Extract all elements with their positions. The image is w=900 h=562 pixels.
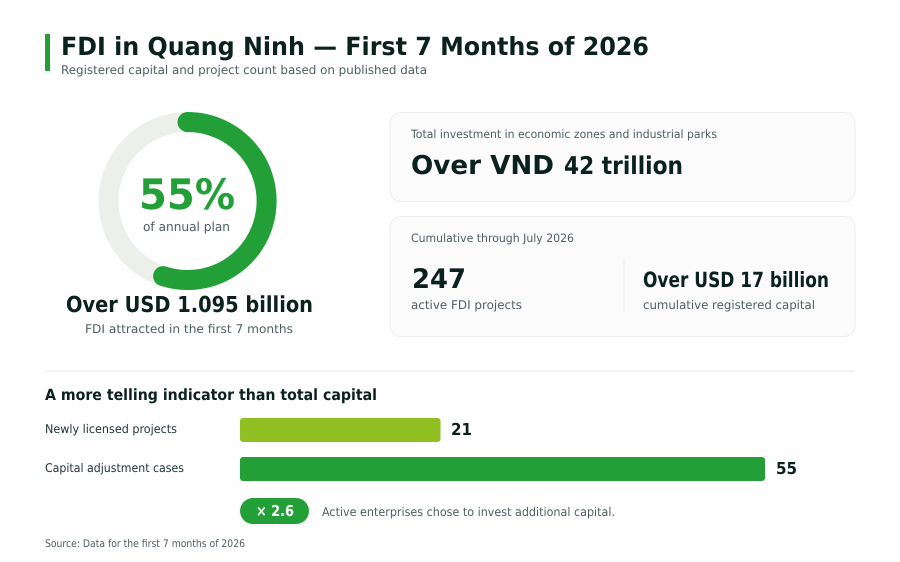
- percentage value: 55%: [139, 170, 235, 219]
- FDI caption: FDI attracted in the first 7 months: [85, 322, 293, 336]
- subtitle: Registered capital and project count based on published data: [61, 63, 427, 77]
- multiplier pill: × 2.6: [256, 502, 294, 520]
- capital value: Over USD 17 billion: [643, 268, 829, 292]
- investment value: Over VND: [411, 151, 554, 181]
- investment value: 42 trillion: [564, 151, 683, 180]
- bar row: capital adjustment cases: Capital adjustment cases: [45, 461, 184, 475]
- donut chart: [108, 122, 267, 280]
- bar row: capital adjustment cases: [45, 457, 797, 481]
- multiplier pill: [240, 498, 309, 524]
- panel: donut progress: [66, 122, 313, 336]
- section heading: A more telling indicator than total capital: [45, 386, 377, 404]
- header: [45, 32, 649, 77]
- bar row: newly licensed projects: [45, 418, 472, 442]
- projects caption: active FDI projects: [411, 298, 522, 312]
- percentage caption: of annual plan: [143, 219, 230, 234]
- investment value: [411, 151, 683, 181]
- FDI amount: Over USD 1.095 billion: [66, 293, 313, 318]
- panel: cumulative through July 2026: [390, 216, 855, 336]
- multiplier note: Active enterprises chose to invest additional capital.: [322, 505, 615, 519]
- projects value: 247: [412, 264, 466, 295]
- cumulative label: Cumulative through July 2026: [411, 231, 574, 245]
- panel: total investment: [390, 112, 855, 202]
- panel: bar comparison: [45, 386, 797, 524]
- investment label: Total investment in economic zones and industrial parks: [410, 127, 717, 141]
- source: Source: Data for the first 7 months of 2026: [45, 538, 245, 550]
- bar row: newly licensed projects: Newly licensed projects: [45, 422, 177, 436]
- capital caption: cumulative registered capital: [643, 298, 815, 312]
- title: FDI in Quang Ninh — First 7 Months of 2026: [61, 32, 649, 61]
- accent bar: [45, 34, 50, 71]
- bar row: newly licensed projects: 21: [451, 420, 472, 439]
- bar row: capital adjustment cases: 55: [776, 459, 797, 478]
